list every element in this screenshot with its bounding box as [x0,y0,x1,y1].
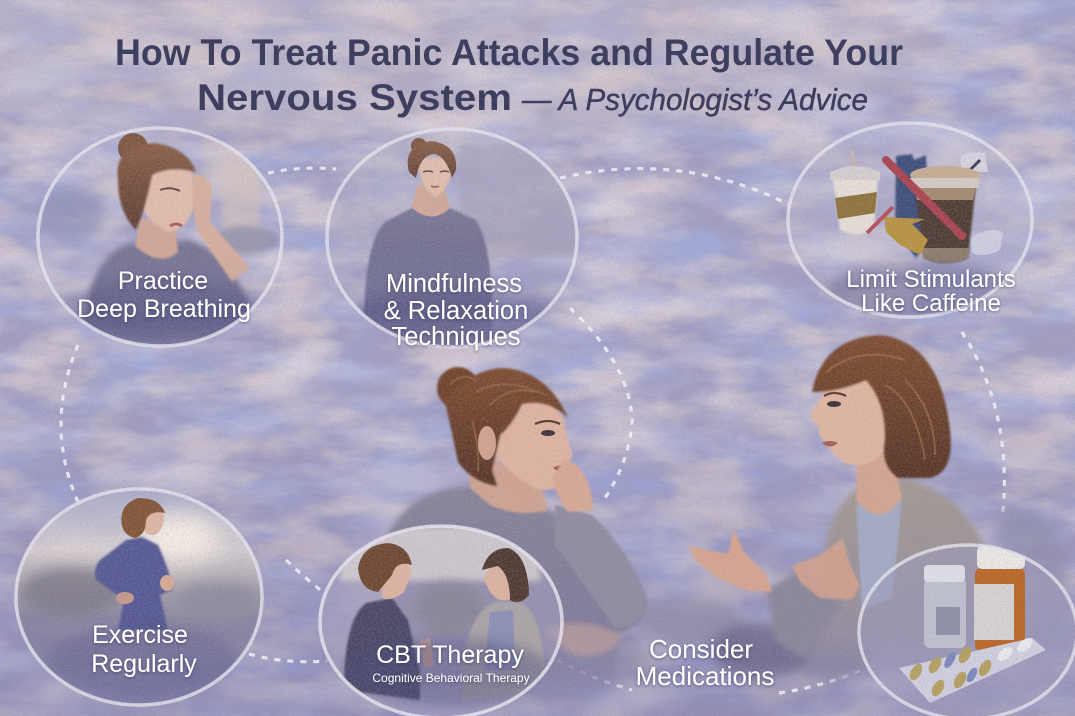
seated woman in centre [380,367,646,690]
label: Practice Deep Breathing: Practice [118,267,208,295]
label: CBT Therapy: CBT Therapy [376,641,524,669]
label: Mindfulness and Relaxation Techniques: Mindfulness [386,270,522,298]
face details [822,393,846,446]
illustration: coffee cups and crossed-out stimulants [830,150,1003,263]
gesturing hands and sleeve [766,570,842,660]
circle: CBT Therapy [320,526,564,716]
face details [535,421,566,471]
woman on the right in cardigan [688,335,1000,680]
illustration: woman jogging at sunrise [14,488,264,706]
central scene: two women talking [380,335,1066,690]
label: Mindfulness and Relaxation Techniques: Techniques [391,323,521,351]
illustration: woman with hand on temple [38,133,280,350]
label: Exercise Regularly: Exercise [92,621,188,649]
couch and cushions [470,505,1066,690]
illustration: woman meditating with trees behind [327,128,577,345]
circle: Exercise Regularly [14,488,264,706]
dashed connectors between treatment circles [61,168,1004,693]
label: Limit Stimulants Like Caffeine: Limit Stimulants [846,266,1016,293]
illustration: therapist and client with city behind [320,526,564,716]
label: Consider Medications: Consider [649,634,753,664]
title: Nervous System [197,77,512,118]
circle: Practice Deep Breathing [38,128,282,350]
illustration: pill bottles and blister pack [899,546,1046,703]
label: Consider Medications: Medications [636,661,774,691]
sublabel: Cognitive Behavioral Therapy: Cognitive Behavioral Therapy [372,671,530,685]
circle: Limit Stimulants Like Caffeine [788,123,1032,320]
circle: Mindfulness and Relaxation Techniques [327,128,577,350]
label: Exercise Regularly: Regularly [91,650,197,678]
label: Mindfulness and Relaxation Techniques: & Relaxation [384,297,528,325]
title: How To Treat Panic Attacks and Regulate Your [115,32,903,73]
circle: medications [859,545,1075,716]
label: Practice Deep Breathing: Deep Breathing [77,295,251,323]
title: — A Psychologist’s Advice [521,82,868,117]
title [115,32,903,118]
label: Limit Stimulants Like Caffeine: Like Caffeine [861,290,1001,317]
